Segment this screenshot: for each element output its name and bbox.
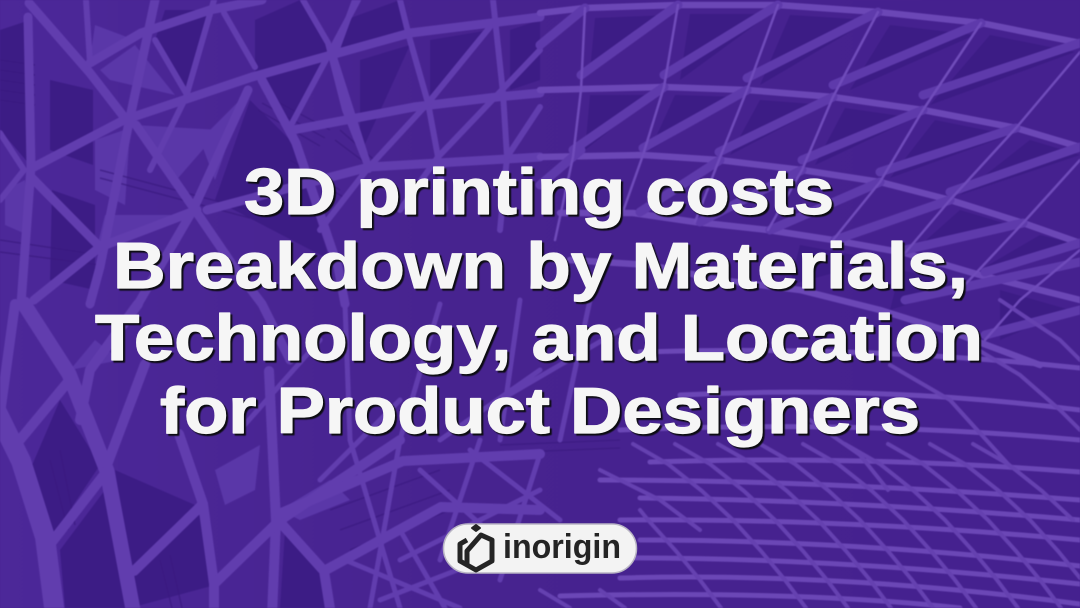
title: shadow layer: 3D printing costs bbox=[246, 157, 836, 230]
title: for Product Designers bbox=[160, 374, 920, 447]
badge pill bbox=[444, 524, 636, 573]
icon: hexagon cube bbox=[460, 525, 492, 570]
lattice beams: thick beams on the left bbox=[0, 0, 620, 608]
title: shadow layer: Breakdown by Materials, bbox=[115, 231, 970, 304]
title: Breakdown by Materials, bbox=[113, 229, 968, 302]
title: Technology, and Location bbox=[95, 301, 983, 374]
title: 3D printing costs bbox=[244, 155, 834, 228]
lattice: lower right arcs and crossing members bbox=[540, 300, 1080, 608]
wordmark: inorigin bbox=[503, 528, 621, 566]
title: shadow layer: for Product Designers bbox=[162, 376, 922, 449]
title: shadow layer: Technology, and Location bbox=[97, 303, 985, 376]
title: shadow layer bbox=[97, 157, 985, 449]
lattice: upper right arcs, diagonals and meridians bbox=[540, 5, 1080, 365]
